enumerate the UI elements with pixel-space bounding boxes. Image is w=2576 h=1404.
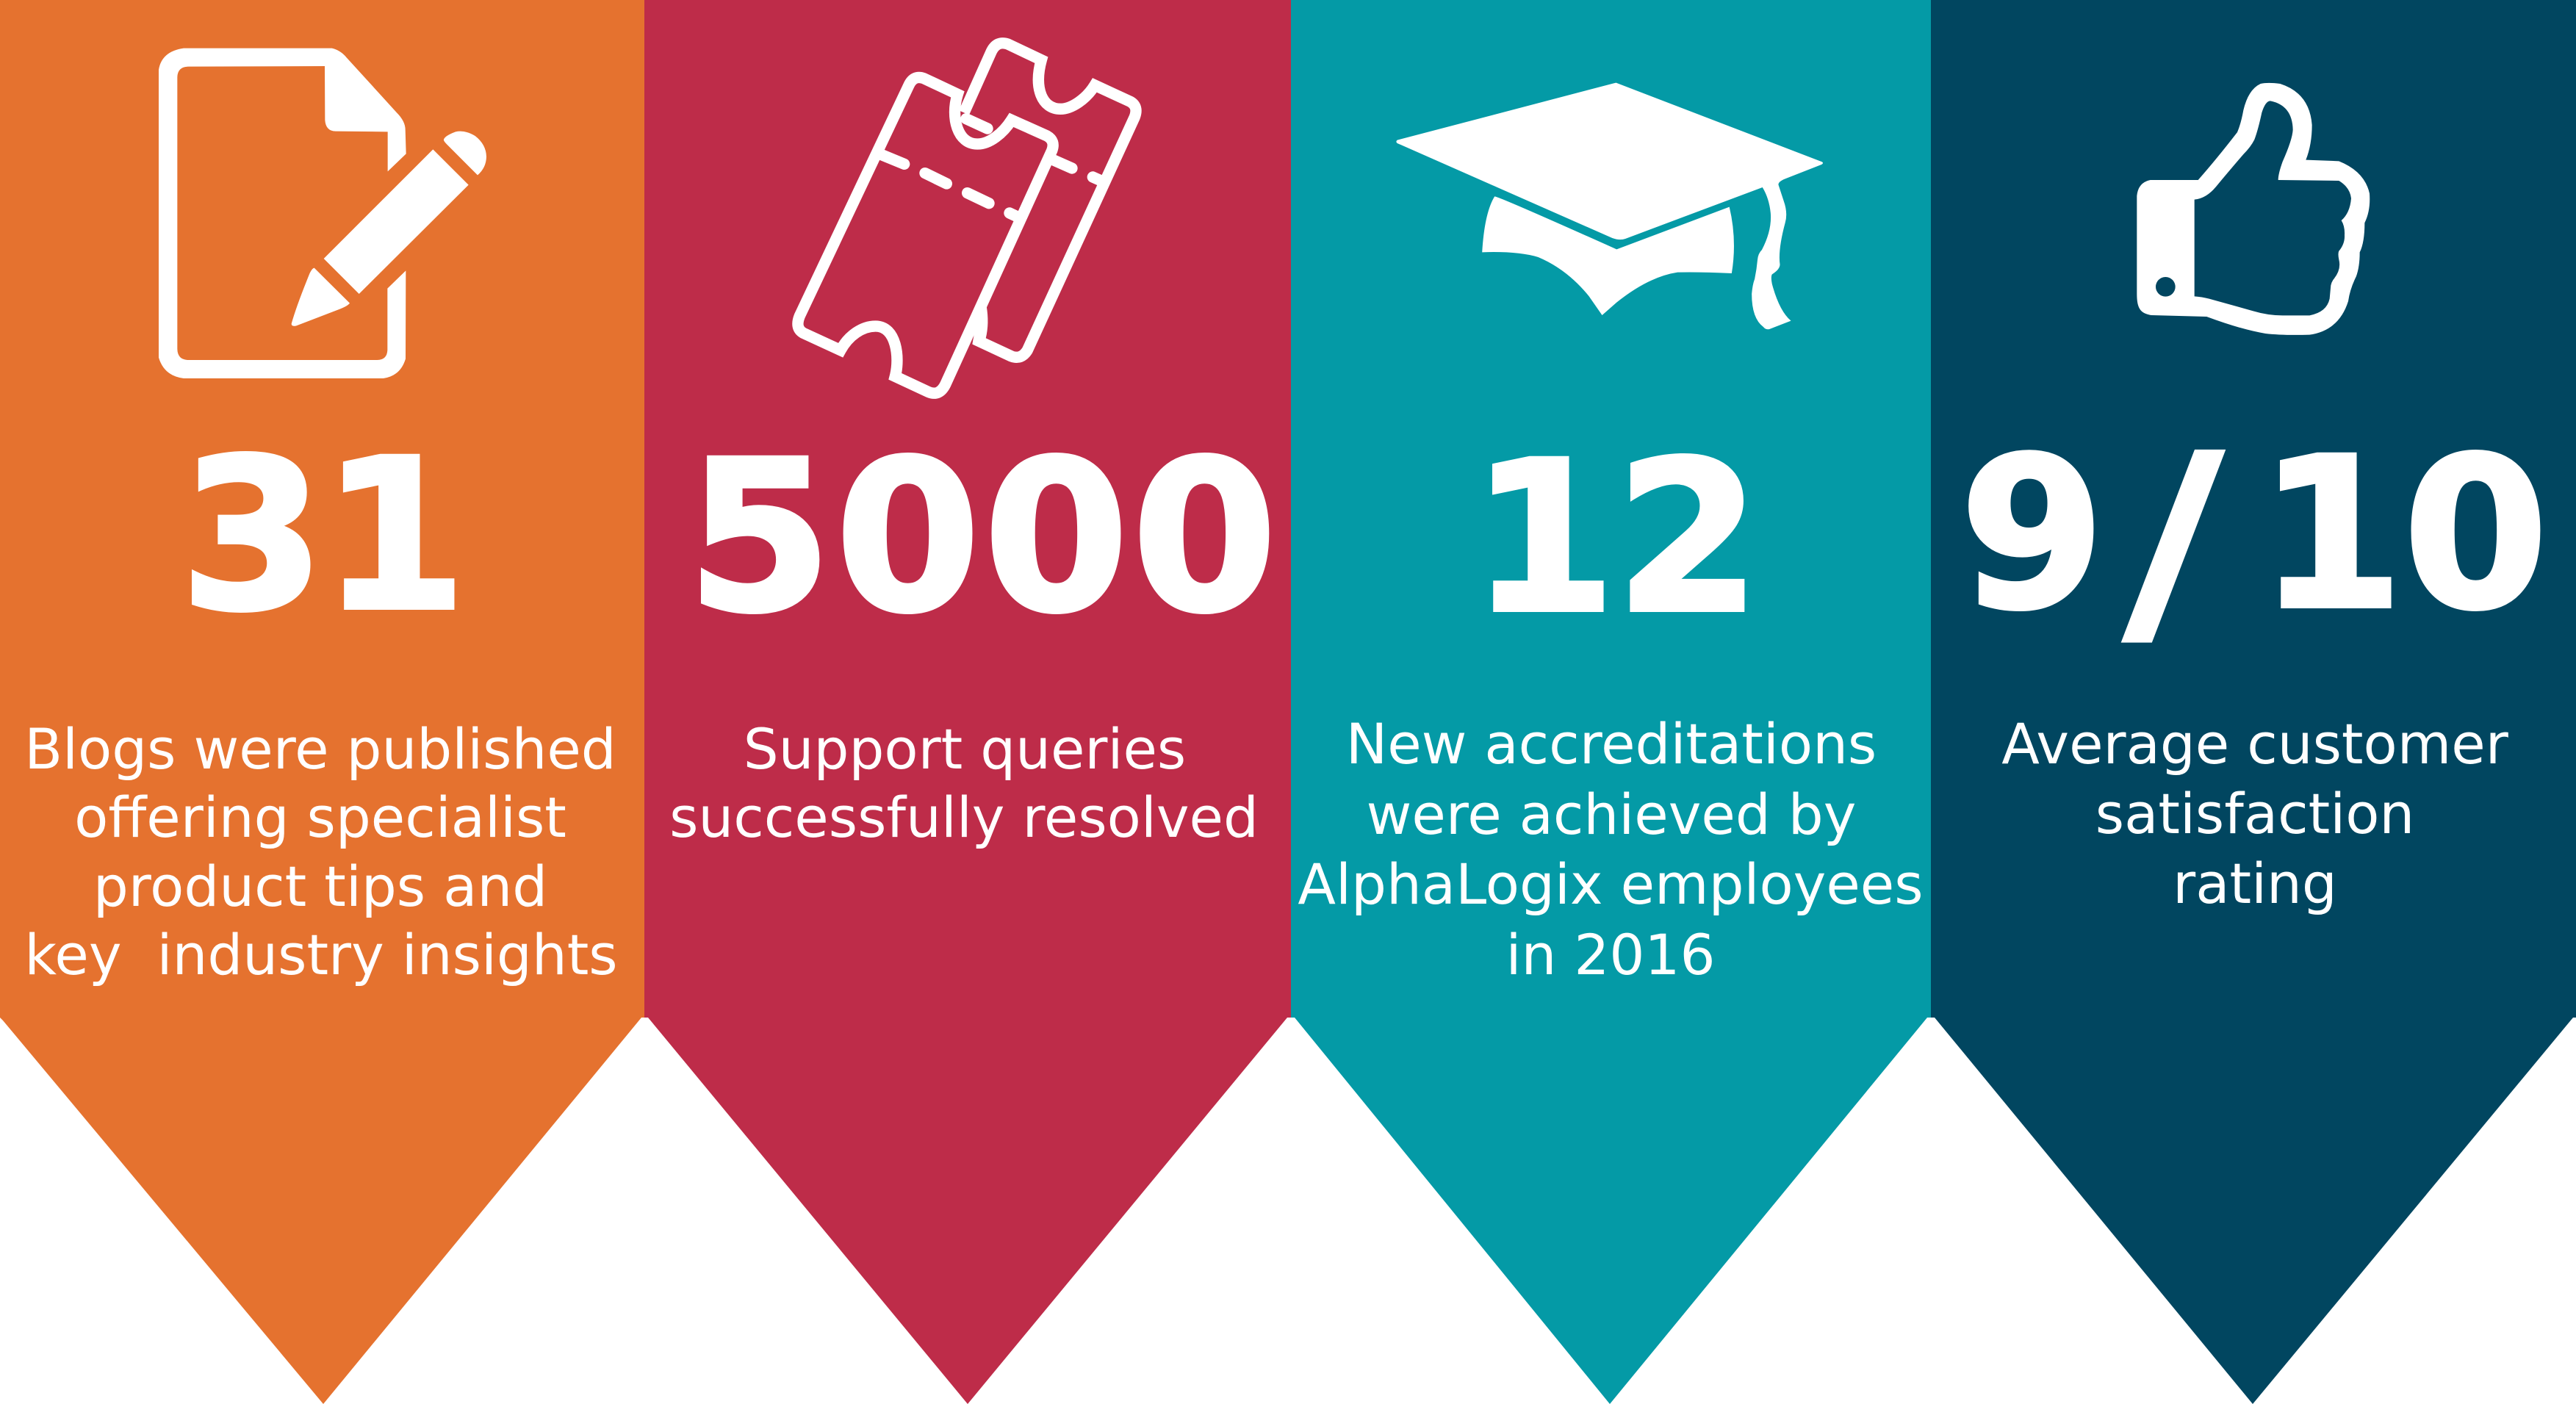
text: blogs description: product tips and bbox=[93, 854, 547, 919]
text: blogs description: offering specialist bbox=[74, 785, 566, 850]
panel: blogs bbox=[0, 0, 644, 1404]
number: 9/10: / bbox=[2121, 403, 2228, 677]
text: satisfaction description: Average customer bbox=[2001, 712, 2509, 777]
text: satisfaction description bbox=[2001, 712, 2509, 916]
panel: satisfaction bbox=[1931, 0, 2576, 1404]
number: 31: 31 bbox=[180, 414, 464, 657]
text: support description: successfully resolved bbox=[669, 785, 1259, 850]
text: support description bbox=[669, 717, 1259, 850]
panel: support queries bbox=[644, 0, 1291, 1404]
banner: orange bbox=[0, 0, 644, 1404]
number: 12: 12 bbox=[1471, 417, 1760, 659]
text: accreditations description: in 2016 bbox=[1506, 923, 1715, 987]
text: blogs description: key industry insights bbox=[24, 923, 618, 987]
text: accreditations description: were achieved by bbox=[1367, 782, 1856, 847]
text: accreditations description: AlphaLogix employees bbox=[1298, 852, 1924, 917]
text: blogs description: Blogs were published bbox=[24, 717, 616, 782]
text: accreditations description: New accreditations bbox=[1346, 712, 1877, 777]
icon: document and pencil bbox=[159, 48, 486, 378]
number: 5000: 5000 bbox=[687, 416, 1281, 658]
banner: navy bbox=[1931, 0, 2576, 1404]
number: 9/10: 9 bbox=[1960, 413, 2104, 655]
text: satisfaction description: rating bbox=[2173, 852, 2337, 916]
banner: teal bbox=[1291, 0, 1931, 1404]
number: 9/10: 10 bbox=[2259, 413, 2548, 655]
icon: tickets bbox=[798, 43, 1136, 393]
icon: thumbs up bbox=[2137, 83, 2370, 335]
number: 9/10 bbox=[1960, 403, 2548, 677]
text: support description: Support queries bbox=[744, 717, 1186, 782]
text: blogs description bbox=[24, 717, 618, 987]
icon: graduation cap bbox=[1396, 83, 1823, 329]
panel: accreditations bbox=[1291, 0, 1931, 1404]
text: accreditations description bbox=[1298, 712, 1924, 987]
banner: crimson bbox=[644, 0, 1291, 1404]
text: satisfaction description: satisfaction bbox=[2095, 782, 2414, 846]
